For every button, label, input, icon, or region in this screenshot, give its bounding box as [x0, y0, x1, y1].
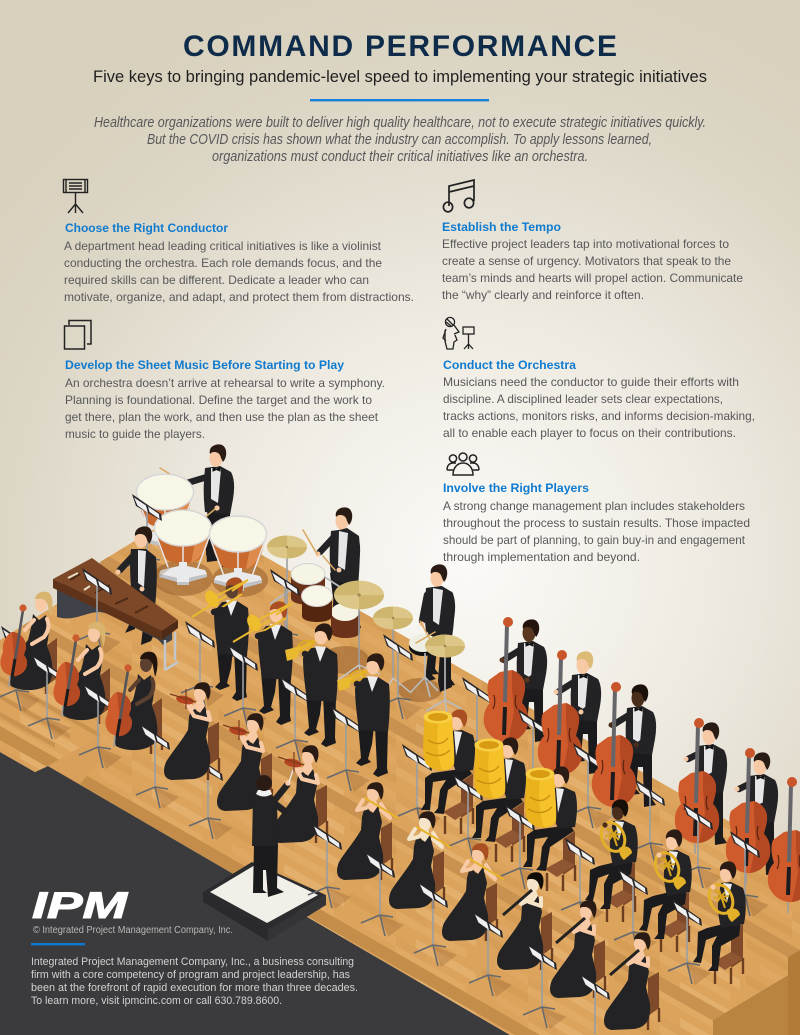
company description: To learn more, visit ipmcinc.com or call 630.789.8600. [31, 995, 282, 1007]
panel: establish the tempo [442, 220, 743, 302]
blue divider [310, 99, 489, 101]
panel: involve the right players [443, 481, 750, 564]
panel: conduct the orchestra [443, 358, 755, 440]
timpani shadows [153, 560, 442, 702]
panel: conduct the orchestra: all to enable each player to focus on their contributions. [443, 426, 736, 440]
conductor [252, 770, 310, 897]
icon: music notes [443, 180, 474, 212]
icon: sheet music pages [64, 320, 91, 349]
panel: involve the right players: should be part of planning, to gain buy-in and engagement [443, 533, 746, 547]
company description: Integrated Project Management Company, Inc., a business consulting [31, 956, 354, 968]
IPM logo: IPM [32, 885, 129, 926]
icon: music stand [64, 180, 88, 213]
panel: choose the right conductor: A department head leading critical initiatives is like a violinist [64, 239, 382, 253]
company description [31, 956, 358, 1007]
panel: develop the sheet music: An orchestra doesn’t arrive at rehearsal to write a symphony. [65, 376, 385, 390]
icon: group of people [447, 453, 479, 475]
cello section [0, 592, 179, 809]
intro paragraph: But the COVID crisis has shown what the industry can accomplish. To apply lessons learned, [147, 132, 652, 148]
title: COMMAND PERFORMANCE [183, 30, 617, 63]
panel: develop the sheet music: Develop the Sheet Music Before Starting to Play [65, 358, 344, 372]
violin section [164, 682, 272, 840]
panel: conduct the orchestra: Conduct the Orchestra [443, 358, 576, 372]
horn section [561, 799, 746, 985]
double bass section [484, 617, 800, 917]
panel: involve the right players: A strong change management plan includes stakeholders [443, 499, 745, 513]
company description: firm with a core competency of program and project leadership, has [31, 969, 350, 981]
timpani player [160, 444, 234, 567]
marimba [53, 558, 178, 670]
stand near basses [458, 677, 501, 763]
panel: conduct the orchestra: discipline. A disciplined leader sets clear expectations, [443, 392, 723, 406]
panel: establish the tempo: the “why” clearly and reinforce it often. [442, 288, 644, 302]
panel: conduct the orchestra: Musicians need the conductor to guide their efforts with [443, 375, 739, 389]
tuba section [398, 709, 577, 891]
clarinet section [497, 872, 659, 1034]
panel: choose the right conductor: motivate, organize, and adapt, and protect them from distractions. [64, 290, 414, 304]
panel: choose the right conductor: Choose the Right Conductor [65, 221, 228, 235]
panel: develop the sheet music: Planning is foundational. Define the target and the work to [65, 393, 372, 407]
flute section [337, 782, 512, 997]
panel: develop the sheet music [65, 358, 385, 441]
panel: establish the tempo: Effective project leaders tap into motivational forces to [442, 237, 729, 251]
panel: involve the right players: Involve the Right Players [443, 481, 589, 495]
marimba player [116, 526, 157, 645]
stand near drummer [379, 634, 422, 720]
panel: establish the tempo: team’s minds and hearts will propel action. Communicate [442, 271, 743, 285]
wood stage risers [0, 511, 800, 1035]
panel: establish the tempo: create a sense of urgency. Motivators that speak to the [442, 254, 731, 268]
panel: choose the right conductor: conducting the orchestra. Each role demands focus, and the [64, 256, 382, 270]
panel: develop the sheet music: get there, plan the work, and then use the plan as the sheet [65, 410, 379, 424]
panel: involve the right players: through implementation and beyond. [443, 550, 640, 564]
panel: involve the right players: throughout the process to sustain results. Those impacted [443, 516, 750, 530]
panel: develop the sheet music: music to guide the players. [65, 427, 205, 441]
timpani drums [128, 474, 266, 591]
cropped stand at bottom edge [580, 973, 610, 1034]
copyright line: © Integrated Project Management Company, Inc. [33, 925, 233, 936]
panel: choose the right conductor: required skills can be different. Dedicate a leader who can [64, 273, 369, 287]
panel: conduct the orchestra: tracks actions, monitors risks, and informs decision-making, [443, 409, 755, 423]
dark stage floor [0, 752, 510, 1035]
footer divider [31, 943, 85, 945]
far right drummer [409, 564, 465, 720]
company description: been at the forefront of rapid execution for more than three decades. [31, 982, 358, 994]
podium [203, 862, 326, 941]
intro paragraph: organizations must conduct their critical initiatives like an orchestra. [212, 149, 588, 165]
violin section front [272, 745, 351, 909]
panel: establish the tempo: Establish the Tempo [442, 220, 561, 234]
panel: choose the right conductor [64, 221, 414, 304]
brass section standing [181, 577, 390, 792]
drum kit and snare player [265, 507, 413, 700]
icon: conductor and stand [443, 317, 474, 349]
subtitle: Five keys to bringing pandemic-level speed to implementing your strategic initiatives [93, 67, 707, 86]
music stand on marimba [78, 568, 121, 654]
intro paragraph [94, 115, 706, 165]
intro paragraph: Healthcare organizations were built to deliver high quality healthcare, not to execute strategic initiatives quickly. [94, 115, 706, 131]
